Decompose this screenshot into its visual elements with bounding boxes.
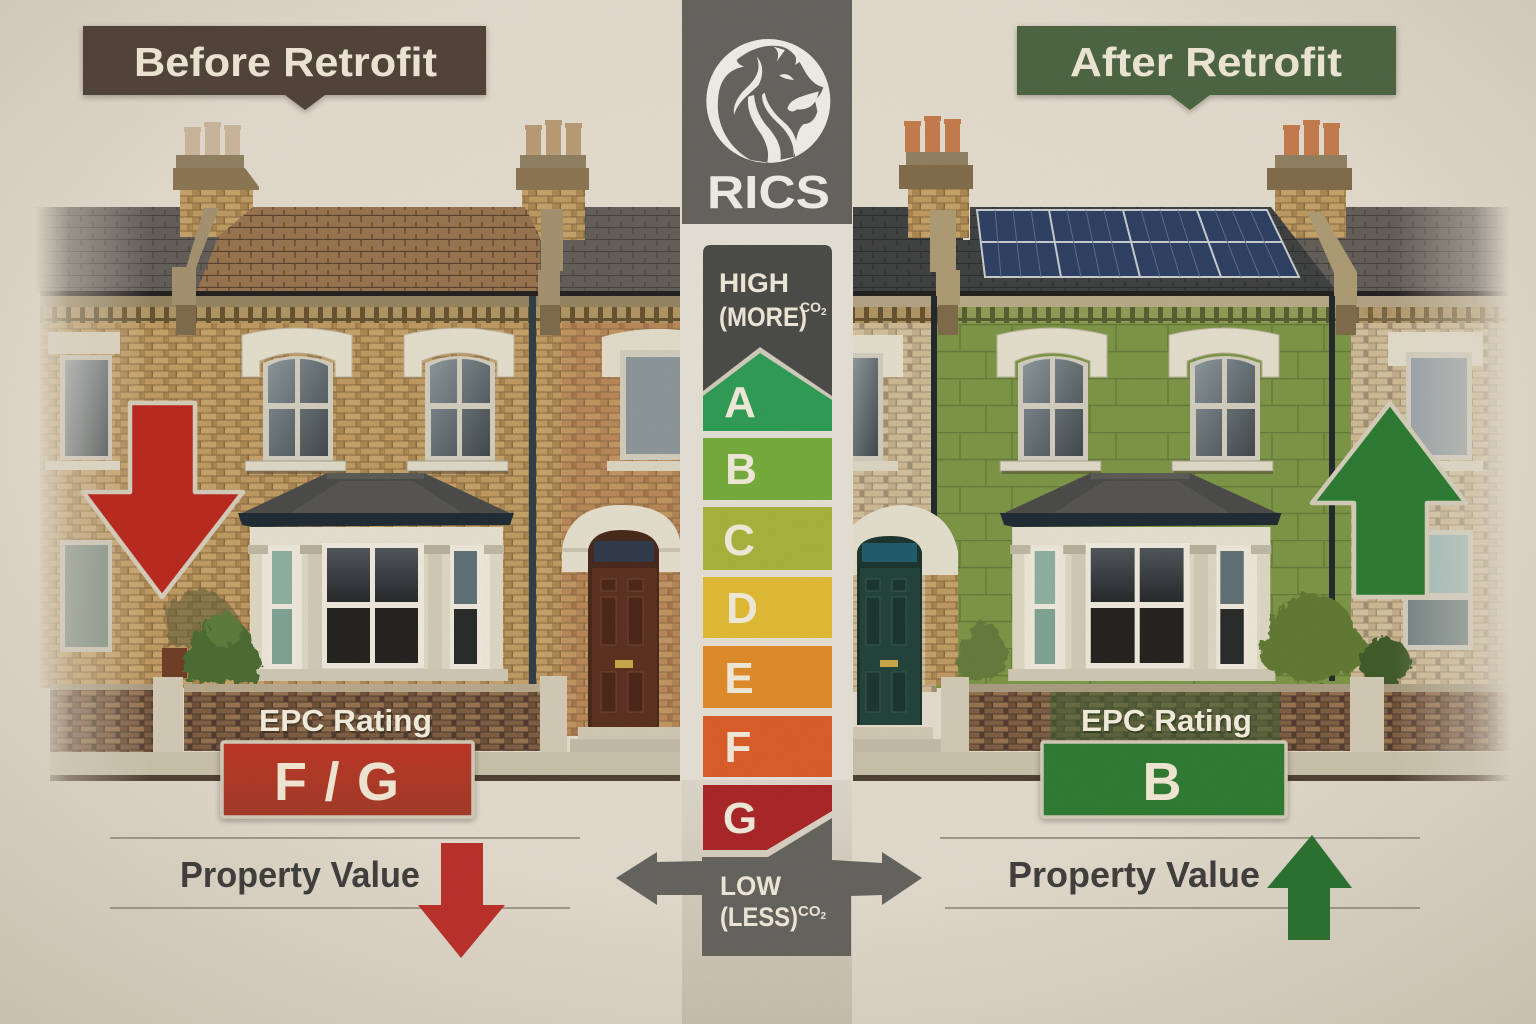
band A: A [724,378,756,427]
neighbour roof right [1290,207,1515,293]
footer: low CO2 with double arrow: (LESS) [720,902,798,932]
big value arrow: up [1312,403,1466,597]
front garden wall [50,676,567,752]
house scene: before retrofit [35,120,680,781]
solar panels [977,210,1299,277]
header: high CO2: (MORE) [719,302,807,332]
footer: low CO2 with double arrow: LOW [720,871,781,901]
banner: Before Retrofit [83,26,486,110]
green insulated facade [934,291,1351,688]
bay window [238,473,514,681]
label: property value before: Property Value [180,854,420,895]
neighbour wall left [853,291,937,692]
label: EPC Rating after: EPC Rating [1082,705,1253,740]
neighbour window upper left [45,332,120,470]
header: high CO2: CO [800,299,821,315]
band G [703,785,832,850]
RICS wordmark: RICS [707,166,830,218]
band D: D [726,584,758,633]
entrance steps [570,727,680,753]
RICS logo block [682,0,852,224]
band A [703,347,832,431]
band B: B [725,445,757,494]
pavement [853,752,1513,781]
brown tiled roof [196,207,540,293]
neighbour roof right [540,207,680,291]
band G: G [723,794,757,843]
header: high CO2: HIGH [719,268,789,298]
pavement [50,752,680,781]
front door [588,530,659,727]
bush right [1260,594,1410,687]
label: EPC Rating before: EPC Rating [259,703,432,738]
slate roof [940,207,1338,293]
neighbour window right [602,329,680,471]
label: EPC Rating after: EPC Rating [1081,703,1252,738]
icon: lion in circle [706,39,830,163]
EPC badge B: B [1142,752,1182,812]
bush [183,613,262,682]
chimney left with pots [173,122,259,237]
band C: C [723,516,755,565]
neighbour window lower left [60,540,112,652]
neighbour roof left [38,207,218,293]
banner: Before Retrofit: Before Retrofit [134,39,437,85]
label: EPC Rating before: EPC Rating [260,705,433,740]
EPC scale [616,245,922,956]
brick facade [40,291,680,736]
front garden wall [941,677,1514,752]
planter [162,648,187,678]
EPC badge B [1042,742,1286,817]
door arch surround [853,505,958,685]
chimney right with pots [516,120,589,240]
banner: After Retrofit [1017,26,1396,110]
band F: F [725,723,751,772]
upper window left [997,328,1107,474]
band F [703,716,832,777]
banner: After Retrofit: After Retrofit [1070,39,1342,85]
house scene: after retrofit [853,116,1520,781]
bay window [1000,473,1282,681]
footer: low CO2 with double arrow [616,818,922,956]
band C [703,507,832,570]
chimney right with terracotta pots [1267,120,1352,238]
neighbour roof left [853,207,963,293]
upper window right [1169,328,1279,474]
entrance steps [853,727,941,753]
upper window right [404,328,514,474]
parapet stones [172,208,563,335]
bush left [957,622,1008,679]
label: property value after: Property Value [1008,854,1260,895]
footer: low CO2 with double arrow: 2 [820,911,826,922]
door arch surround [562,505,680,572]
band E [703,646,832,708]
big value arrow: down [83,403,243,597]
ivy [165,590,248,650]
band B [703,438,832,500]
header: high CO2: 2 [821,307,827,318]
divider lines [110,838,1420,908]
downpipes [931,296,1335,681]
upper window left [242,328,352,474]
downpipe [529,296,536,685]
EPC badge F/G: F / G [274,752,399,812]
front door [857,536,922,725]
center column background [680,224,853,1024]
header: high CO2 [703,245,832,400]
band E: E [724,654,754,703]
arrow: value down [418,843,505,958]
footer: low CO2 with double arrow: CO [798,903,820,920]
EPC badge F/G [222,742,473,817]
band D [703,577,832,638]
parapet stones [930,210,1357,335]
neighbour wall right [1350,291,1520,692]
chimney left with terracotta pots [899,116,973,238]
arrow: value up [1267,835,1352,940]
